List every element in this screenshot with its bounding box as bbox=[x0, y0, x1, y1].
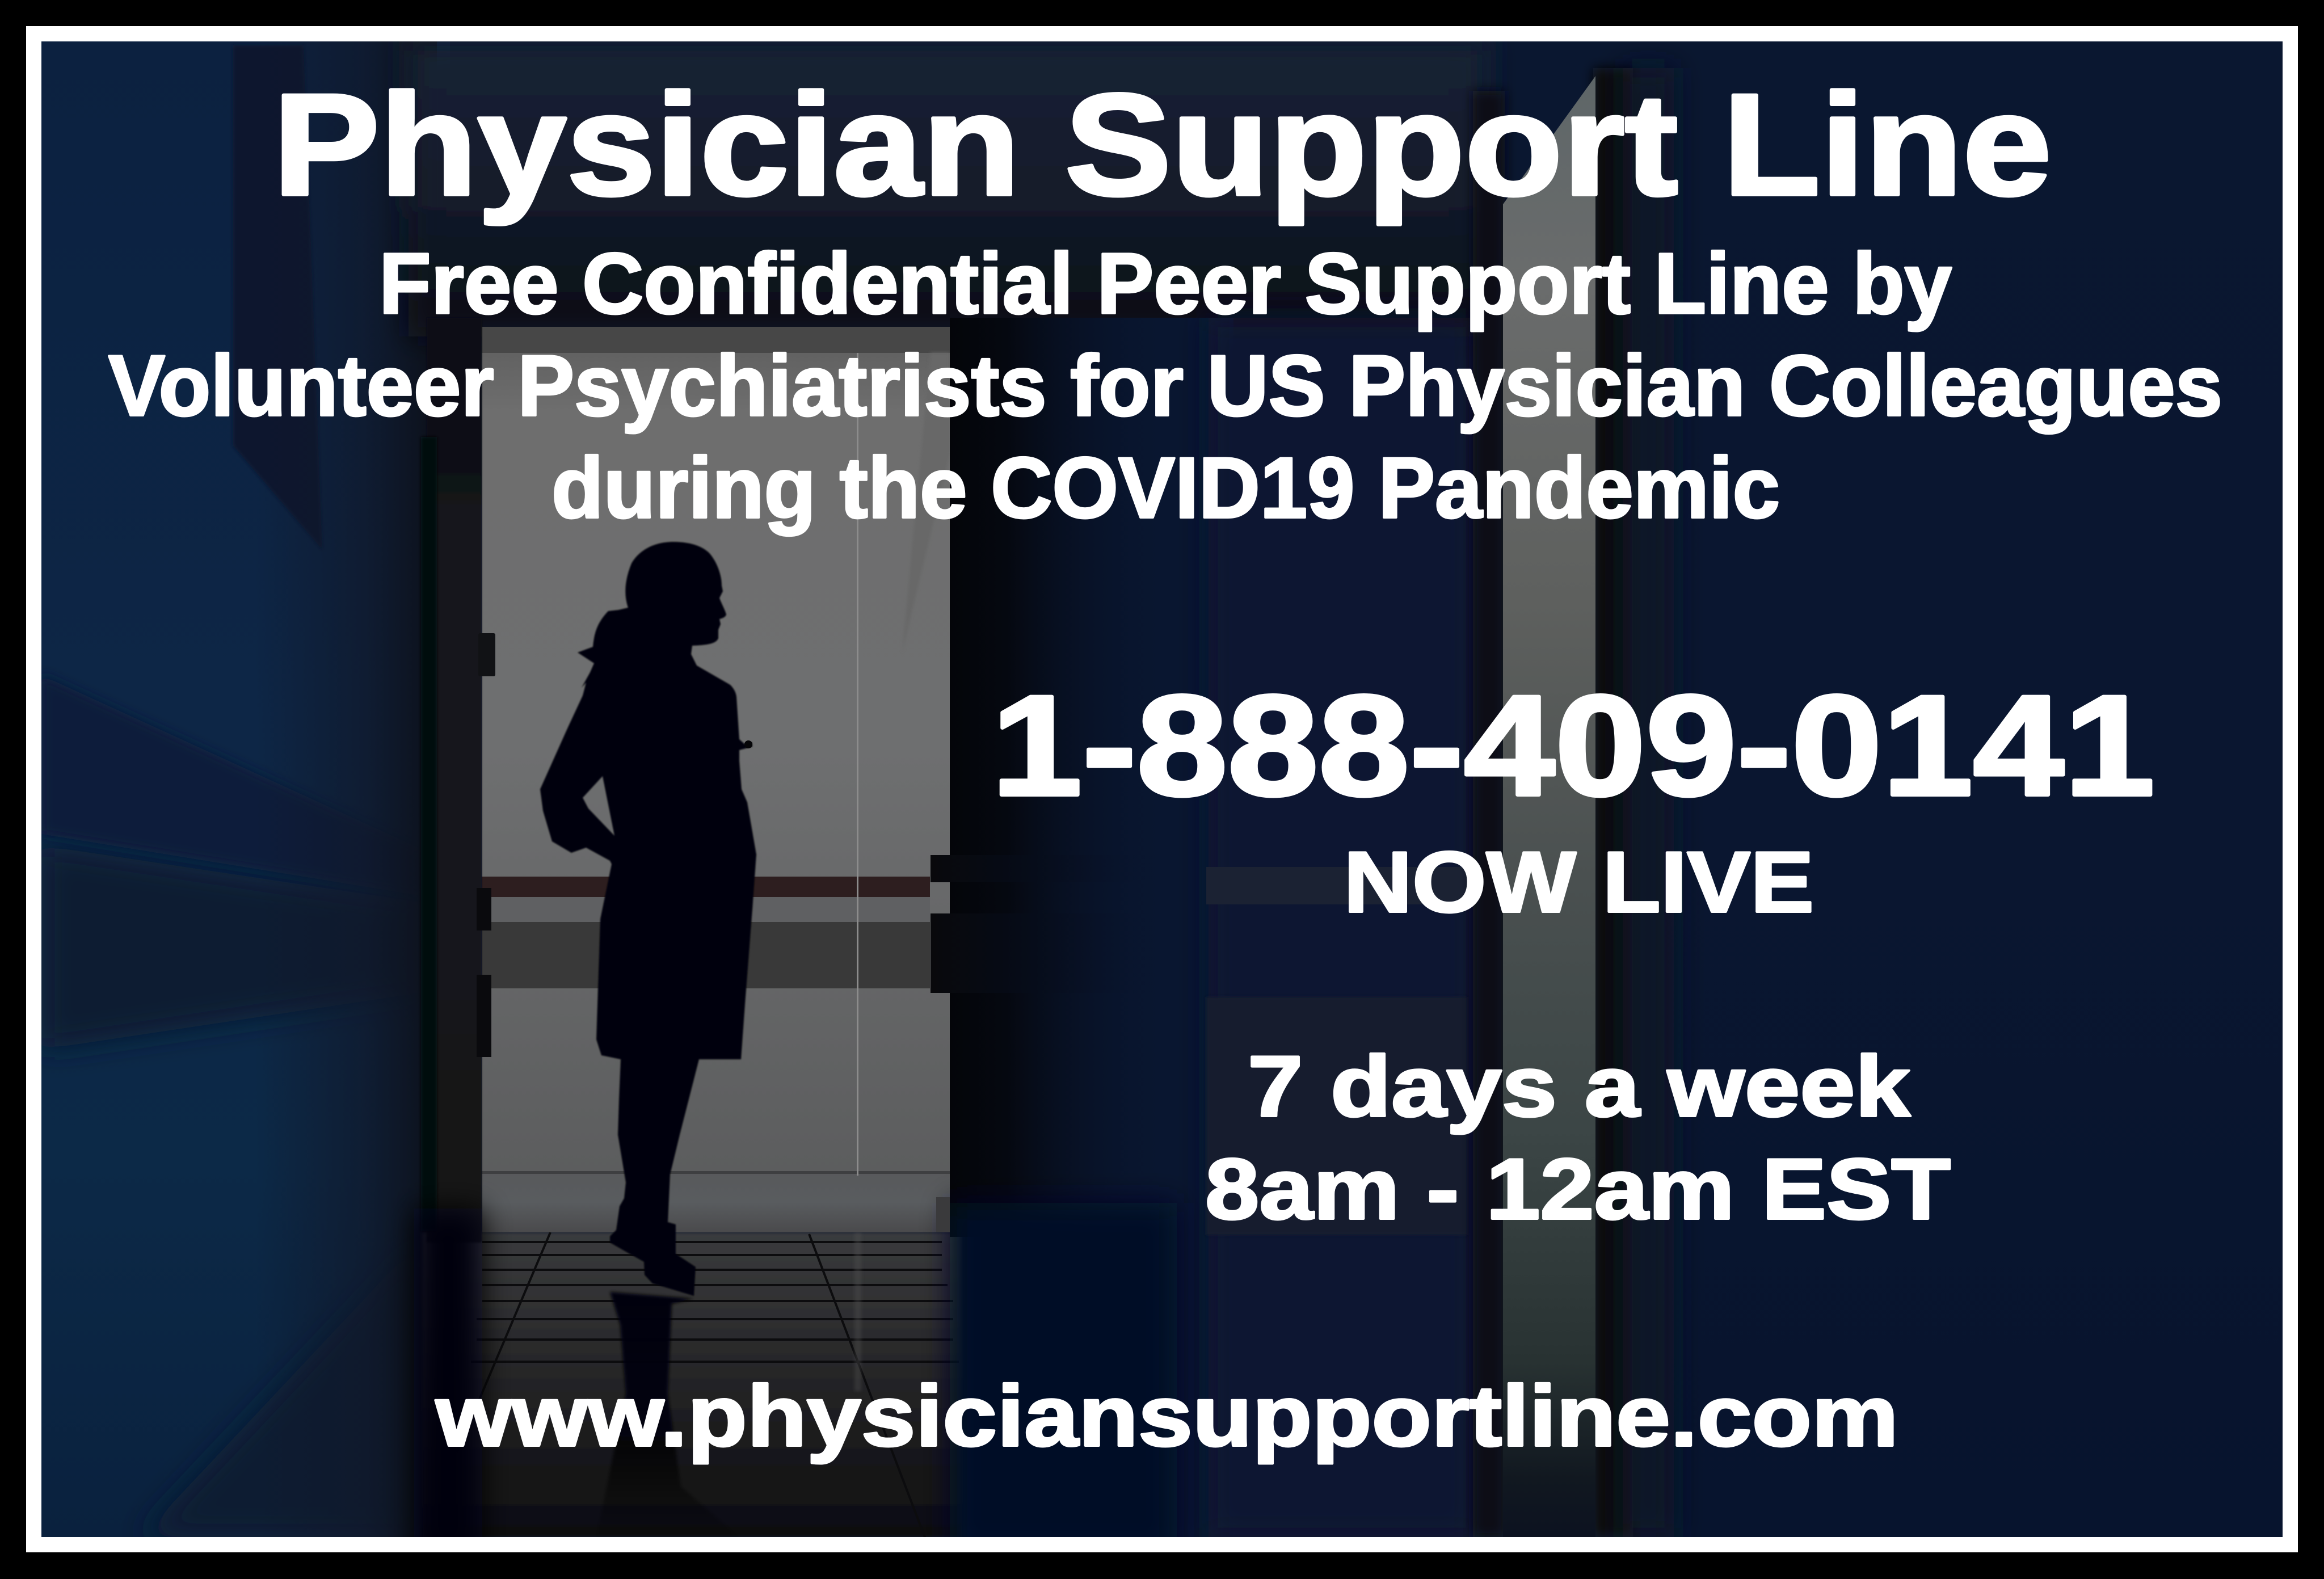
subtitle text block: Volunteer Psychiatrists for US Physician Colleagues bbox=[108, 338, 2222, 434]
hours of operation: 7 days a week bbox=[1248, 1038, 1911, 1135]
stethoscope head bbox=[744, 740, 752, 748]
right side of corridor bbox=[950, 41, 2283, 1537]
grey wall band bbox=[482, 922, 930, 988]
hours of operation bbox=[1205, 1038, 1951, 1237]
ceiling bbox=[409, 41, 1487, 336]
silhouette of doctor bbox=[540, 542, 756, 1296]
floor bbox=[423, 1232, 962, 1542]
subtitle text block: Free Confidential Peer Support Line by bbox=[379, 235, 1952, 332]
lit strip of far doorway bbox=[1503, 76, 1595, 1537]
hours of operation: 8am - 12am EST bbox=[1205, 1141, 1951, 1237]
website url: www.physiciansupportline.com bbox=[435, 1368, 1898, 1464]
subtitle text block bbox=[108, 235, 2222, 536]
lit doorway bbox=[482, 327, 950, 1232]
now live label: NOW LIVE bbox=[1344, 834, 1814, 930]
wall switch by the door bbox=[478, 633, 495, 676]
handrail bbox=[482, 877, 930, 897]
title: Physician Support Line bbox=[273, 64, 2052, 226]
subtitle text block: during the COVID19 Pandemic bbox=[551, 440, 1780, 536]
left wall bbox=[41, 41, 450, 1537]
phone number: 1-888-409-0141 bbox=[991, 666, 2155, 826]
silhouette reflection on floor bbox=[596, 1292, 739, 1537]
dark door frames bbox=[414, 318, 1177, 1560]
